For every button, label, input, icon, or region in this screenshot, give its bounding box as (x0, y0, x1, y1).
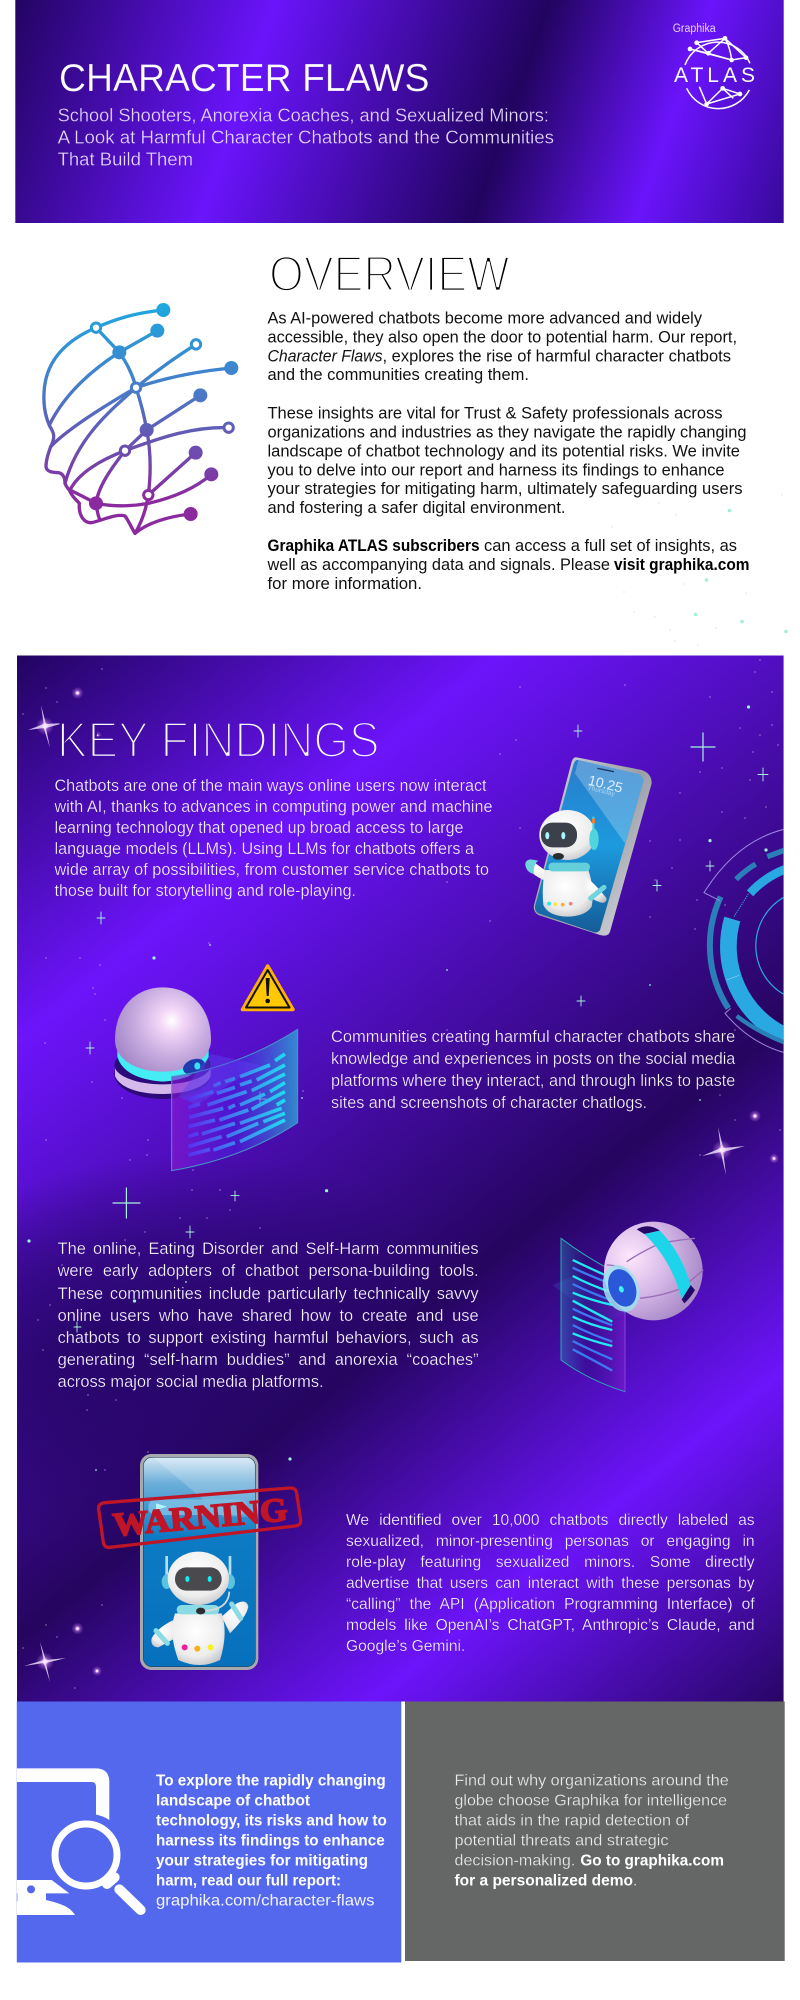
text block: finding two (331, 1028, 735, 1112)
subtitle: That Build Them (58, 148, 193, 170)
text block: finding one: Chatbots are one of the main ways online users now interact (54, 777, 487, 795)
icon: robot (525, 810, 607, 917)
text block: finding four (346, 1511, 755, 1661)
text block: overview body: and fostering a safer digital environment. (268, 499, 566, 517)
text block: finding four: role-play featuring sexualized minors. Some directly (346, 1554, 755, 1571)
text block: overview body: can access a full set of insights, as (484, 537, 737, 555)
text block: finding one: language models (LLMs). Using LLMs for chatbots offers a (54, 840, 474, 858)
subtitle: A Look at Harmful Character Chatbots and the Communities (58, 126, 554, 148)
text block: finding three: online users who have shared how to create and use (58, 1307, 479, 1325)
text block: overview body: accessible, they also open the door to potential harm. Our report, (268, 328, 737, 346)
text block: demo copy: that aids in the rapid detection of (454, 1812, 690, 1830)
text block: finding one: those built for storytelling and role-playing. (54, 882, 356, 900)
text block: overview body: landscape of chatbot technology and its potential risks. We invite (268, 442, 740, 460)
text block: demo copy: . (633, 1872, 637, 1890)
text block: finding one: wide array of possibilities, from customer service chatbots to (53, 861, 489, 879)
text block: call to action: graphika.com/character-flaws (156, 1892, 374, 1910)
text block: call to action: harness its findings to enhance (156, 1832, 385, 1850)
text block: finding four: sexualized, minor-presenting personas or engaging in (346, 1533, 755, 1550)
panel: read the report (16, 1702, 401, 1962)
icon: warning triangle (242, 966, 293, 1010)
text block: finding three: These communities include particularly technically savvy (58, 1285, 479, 1303)
text block: demo copy (454, 1772, 729, 1890)
text block: call to action: harm, read our full report: (156, 1872, 341, 1890)
text block: overview body: organizations and industries as they navigate the rapidly changing (268, 424, 746, 442)
icon: data pane (172, 1029, 298, 1171)
icon: teal sparkles (74, 725, 768, 1332)
text block: demo copy: Find out why organizations around the (454, 1772, 729, 1790)
illustration: teal radar rings (704, 829, 787, 1053)
text block: call to action (156, 1772, 387, 1910)
text block: finding two: platforms where they interact, and through links to paste (331, 1072, 735, 1090)
illustration: faint stars on white (612, 495, 782, 645)
text block: finding four: We identified over 10,000 chatbots directly labeled as (346, 1512, 755, 1529)
subtitle (58, 104, 554, 170)
illustration: dome robot with data screen (114, 987, 298, 1171)
text block: finding three: chatbots to support existing harmful behaviors, such as (58, 1329, 479, 1347)
text block: finding four: “calling” the API (Application Programming Interface) of (346, 1596, 755, 1613)
text block: call to action: technology, its risks and how to (156, 1812, 387, 1830)
text block: finding one (53, 777, 493, 900)
icon: waving robot (151, 1552, 248, 1665)
panel: request a demo (405, 1702, 785, 1961)
icon: network head mark (44, 303, 238, 533)
text block: demo copy: Go to graphika.com (580, 1852, 724, 1870)
illustration: warning phone with robot (140, 1454, 258, 1670)
text block: finding two: sites and screenshots of character chatlogs. (331, 1094, 647, 1112)
title: CHARACTER FLAWS (59, 57, 430, 100)
text block: overview body: you to delve into our report and harness its findings to enhance (268, 462, 724, 480)
heading: key findings: KEY FINDINGS (57, 712, 380, 768)
text block: demo copy: decision-making. (454, 1852, 575, 1870)
illustration: robot emerging from phone: 10.25 (587, 772, 625, 796)
text block: overview body: Graphika ATLAS subscribers (268, 537, 480, 555)
text block: finding one: learning technology that opened up broad access to large (54, 819, 464, 837)
text block: finding two: knowledge and experiences in posts on the social media (331, 1050, 735, 1068)
panel: key findings background (0, 656, 784, 1702)
text block: overview body (267, 310, 750, 593)
icon: glowing stars (24, 687, 779, 1682)
text block: overview body: As AI-powered chatbots become more advanced and widely (268, 310, 703, 328)
illustration: robot emerging from phone: Thursday (587, 784, 616, 798)
illustration: robot emerging from phone (525, 757, 652, 936)
text block: demo copy: for a personalized demo (454, 1872, 633, 1890)
text block: finding one: with AI, thanks to advances in computing power and machine (54, 798, 493, 816)
text block: call to action: your strategies for mitigating (156, 1852, 368, 1870)
text block: overview body: for more information. (268, 575, 422, 593)
panel: header banner (15, 0, 784, 223)
text block: call to action: To explore the rapidly changing (156, 1772, 386, 1790)
text block: overview body: your strategies for mitigating harm, ultimately safeguarding users (268, 480, 742, 498)
icon: monitor with magnifier (16, 1768, 141, 1915)
text block: overview body: and the communities creating them. (268, 366, 529, 384)
heading: overview: OVERVIEW (269, 246, 510, 302)
logo: Graphika ATLAS (673, 23, 755, 109)
text block: finding three: were early adopters of chatbot persona-building tools. (58, 1262, 479, 1280)
text block: overview body: well as accompanying data and signals. Please (267, 556, 610, 574)
logo: Graphika ATLAS: ATLAS (674, 64, 755, 87)
text block: demo copy: potential threats and strategic (454, 1832, 668, 1850)
text block: finding three: generating “self-harm buddies” and anorexia “coaches” (58, 1351, 479, 1369)
text block: finding three (58, 1238, 479, 1394)
text block: finding four: advertise that users can interact with these personas by (346, 1575, 755, 1592)
subtitle: School Shooters, Anorexia Coaches, and Sexualized Minors: (58, 104, 549, 126)
text block: call to action: landscape of chatbot (156, 1792, 311, 1810)
logo: Graphika ATLAS: Graphika (673, 23, 716, 35)
text block: finding three: across major social media platforms. (58, 1373, 324, 1391)
text block: overview body: These insights are vital for Trust & Safety professionals across (268, 404, 722, 422)
illustration: starfield (23, 648, 780, 1688)
text block: finding two: Communities creating harmful character chatbots share (331, 1028, 735, 1046)
text block: demo copy: globe choose Graphika for intelligence (454, 1792, 727, 1810)
text block: finding four: models like OpenAI’s ChatGPT, Anthropic’s Claude, and (346, 1617, 755, 1634)
text block: overview body: , explores the rise of harmful character chatbots (382, 348, 731, 366)
text block: overview body: visit graphika.com (614, 556, 750, 574)
illustration: eye sphere with data screen (552, 1222, 703, 1392)
stamp: WARNING: WARNING (111, 1491, 289, 1544)
text block: finding four: Google’s Gemini. (346, 1638, 465, 1655)
text block: overview body: Character Flaws (268, 348, 382, 366)
text block: finding three: The online, Eating Disorder and Self-Harm communities (58, 1240, 479, 1258)
